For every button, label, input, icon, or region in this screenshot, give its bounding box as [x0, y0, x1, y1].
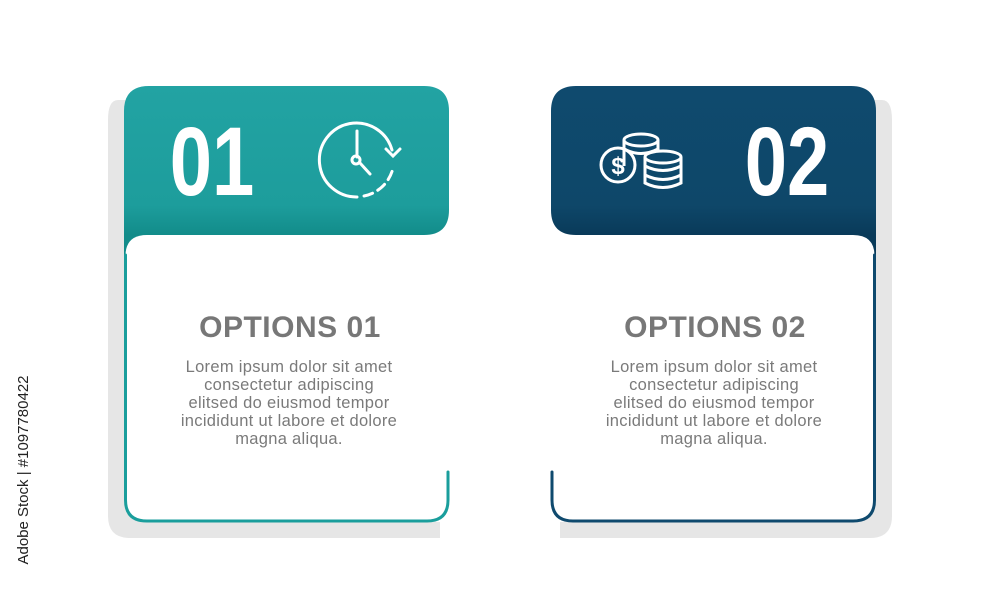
text 01: incididunt ut labore et dolore	[181, 412, 397, 430]
text 02: incididunt ut labore et dolore	[606, 412, 822, 430]
text 01: elitsed do eiusmod tempor	[188, 394, 390, 412]
shadow 01	[108, 100, 440, 538]
header 01	[124, 86, 449, 270]
text 01: consectetur adipiscing	[204, 376, 374, 394]
watermark id: Adobe Stock | #1097780422	[15, 375, 32, 565]
text 02: Lorem ipsum dolor sit amet	[611, 358, 818, 376]
title 01: OPTIONS 01	[199, 311, 381, 344]
icon: coins	[601, 134, 681, 188]
text 02: elitsed do eiusmod tempor	[613, 394, 815, 412]
text 02: consectetur adipiscing	[629, 376, 799, 394]
icon: clock	[319, 123, 400, 197]
body card 01	[126, 235, 448, 521]
number 01: 01	[170, 108, 254, 216]
panel: option 01	[108, 86, 449, 538]
header 02	[551, 86, 876, 270]
text 01: Lorem ipsum dolor sit amet	[186, 358, 393, 376]
title 02: OPTIONS 02	[624, 311, 806, 344]
panel: option 02	[551, 86, 892, 538]
shadow 02	[560, 100, 892, 538]
icon: coins: $	[611, 153, 625, 180]
text 01: magna aliqua.	[235, 430, 343, 448]
text 02: magna aliqua.	[660, 430, 768, 448]
body card 02	[552, 235, 874, 521]
number 02: 02	[745, 108, 829, 216]
